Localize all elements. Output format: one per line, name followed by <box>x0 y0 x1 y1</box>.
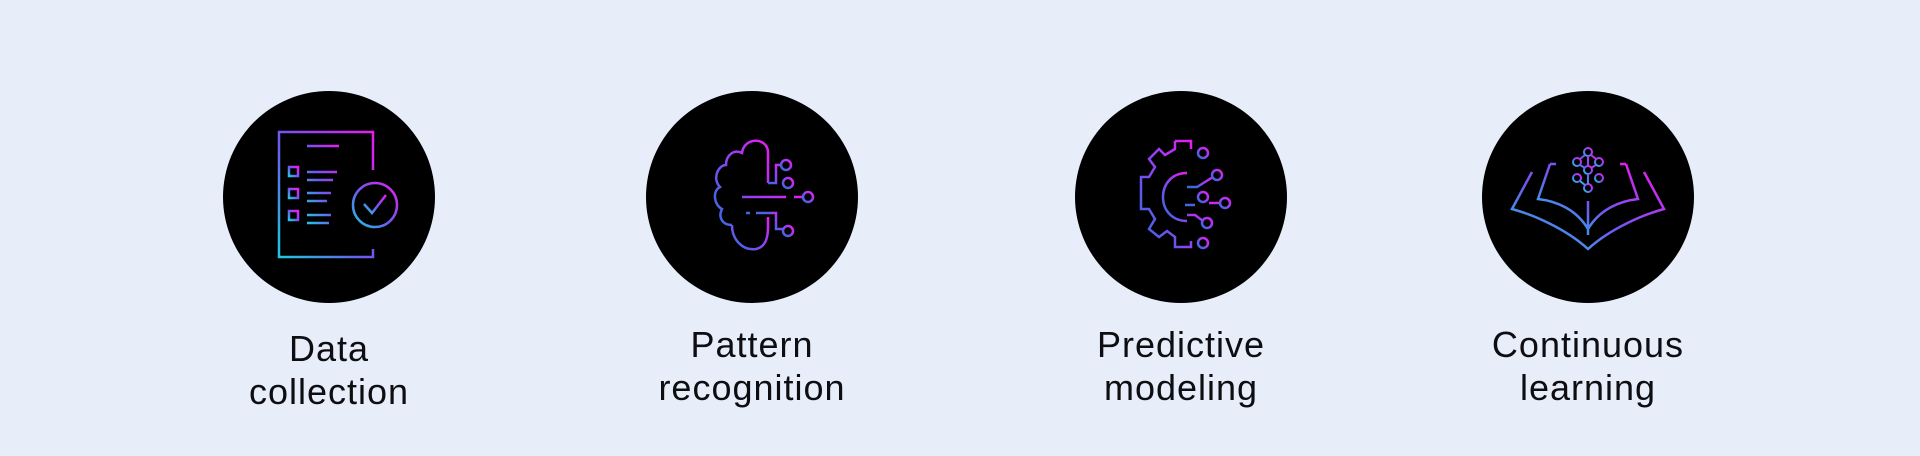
icon: brain circuit <box>646 91 858 303</box>
panel: predictive modeling <box>1075 91 1287 408</box>
icon: gear circuit <box>1075 91 1287 303</box>
label: recognition <box>658 367 846 408</box>
label: Pattern <box>690 324 814 365</box>
label <box>249 328 409 412</box>
label: learning <box>1520 367 1656 408</box>
panel: continuous learning <box>1482 91 1694 408</box>
label: Predictive <box>1097 324 1265 365</box>
label <box>658 324 846 408</box>
panel: pattern recognition <box>646 91 858 408</box>
label: modeling <box>1104 367 1258 408</box>
icon: book network <box>1482 91 1694 303</box>
panel: data collection <box>223 91 435 412</box>
label: collection <box>249 371 409 412</box>
label: Data <box>289 328 369 369</box>
label <box>1492 324 1684 408</box>
label <box>1097 324 1265 408</box>
icon: checklist document <box>223 91 435 303</box>
label: Continuous <box>1492 324 1684 365</box>
